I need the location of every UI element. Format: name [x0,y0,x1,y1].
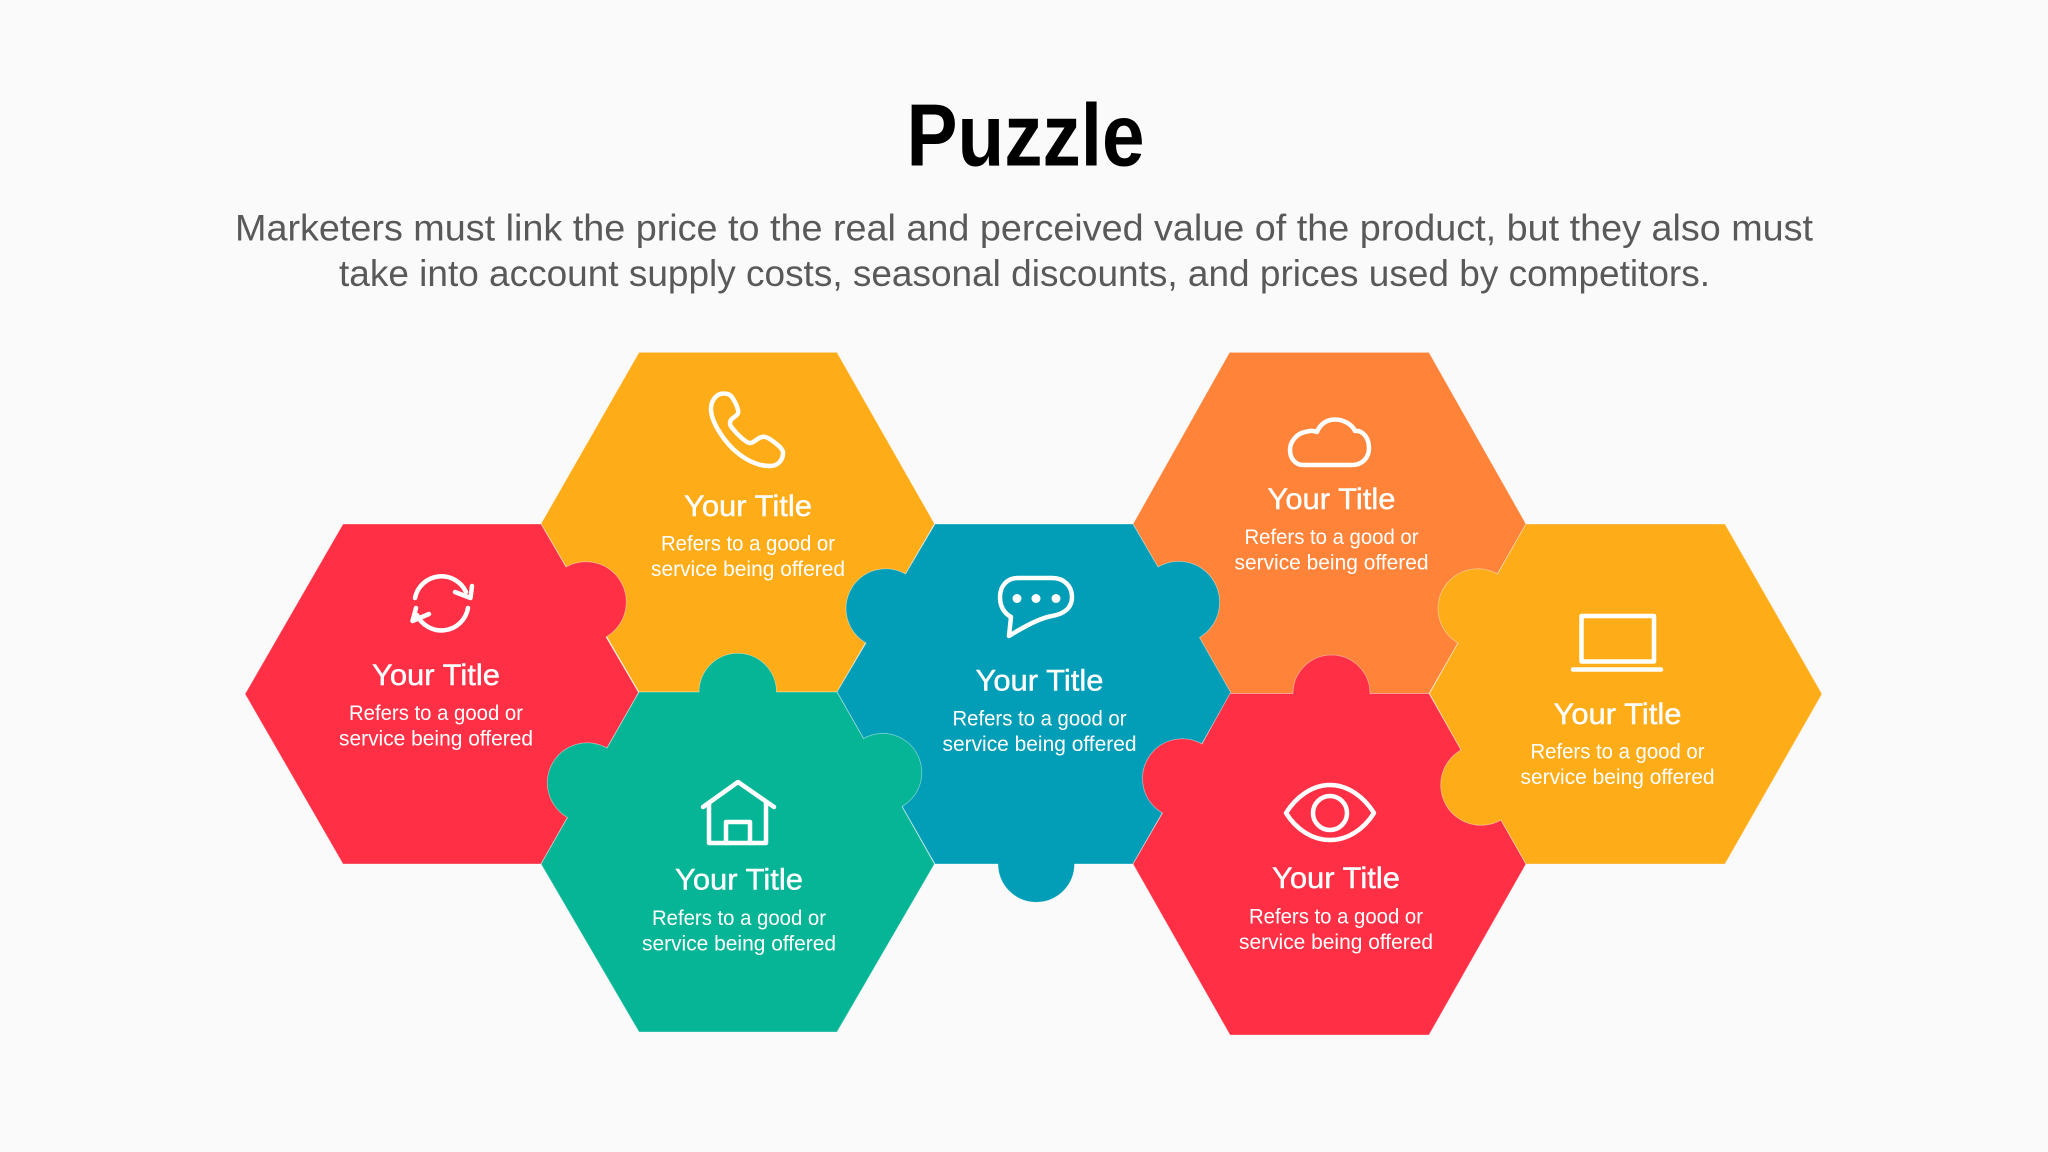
subtitle: take into account supply costs, seasonal discounts, and prices used by competitors. [339,253,1710,294]
text: yellow card [651,490,845,581]
text: yellow card: Refers to a good or [661,532,835,556]
subtitle [235,208,1814,294]
piece: teal hexagon [837,524,1231,902]
icon: chat bubble [1000,578,1072,636]
text: green card: Your Title [675,864,803,896]
text: teal card [942,664,1136,756]
subtitle: Marketers must link the price to the real and perceived value of the product, but they also must [235,208,1814,248]
text: red card: service being offered [339,727,533,751]
text: red card right [1239,862,1433,954]
text: teal card: service being offered [942,732,1136,756]
piece: green hexagon [541,653,934,1032]
text: red card: Your Title [372,659,500,692]
text: green card: Refers to a good or [652,906,826,930]
text: red card right: Your Title [1272,862,1400,895]
text: yellow card: Your Title [684,490,812,523]
text: orange card: Your Title [1268,483,1396,516]
title: Puzzle [906,86,1144,184]
icon: cloud [1290,420,1369,465]
text: orange card [1234,483,1428,574]
icon: eye [1286,785,1374,840]
text: teal card: Refers to a good or [952,706,1126,730]
text: amber card: Refers to a good or [1530,740,1704,764]
text: red card [339,659,533,751]
icon: phone [711,393,783,466]
text: red card right: service being offered [1239,930,1433,954]
piece: yellow hexagon [541,352,934,692]
text: amber card [1520,698,1714,789]
piece: amber hexagon right [1430,524,1822,864]
icon: house [703,782,774,843]
text: green card: service being offered [642,932,836,956]
text: red card: Refers to a good or [349,701,523,725]
piece: red hexagon left [245,524,638,864]
text: amber card: Your Title [1554,698,1682,731]
icon: laptop [1573,616,1661,670]
text: orange card: service being offered [1234,550,1428,574]
text: teal card: Your Title [976,664,1104,698]
text: red card right: Refers to a good or [1249,904,1423,928]
icon: sync arrows [412,576,472,630]
text: yellow card: service being offered [651,557,845,581]
text: orange card: Refers to a good or [1244,525,1418,549]
text: amber card: service being offered [1520,765,1714,789]
text: green card [642,864,836,956]
piece: red hexagon right [1133,655,1526,1035]
piece: orange hexagon [1133,352,1526,694]
